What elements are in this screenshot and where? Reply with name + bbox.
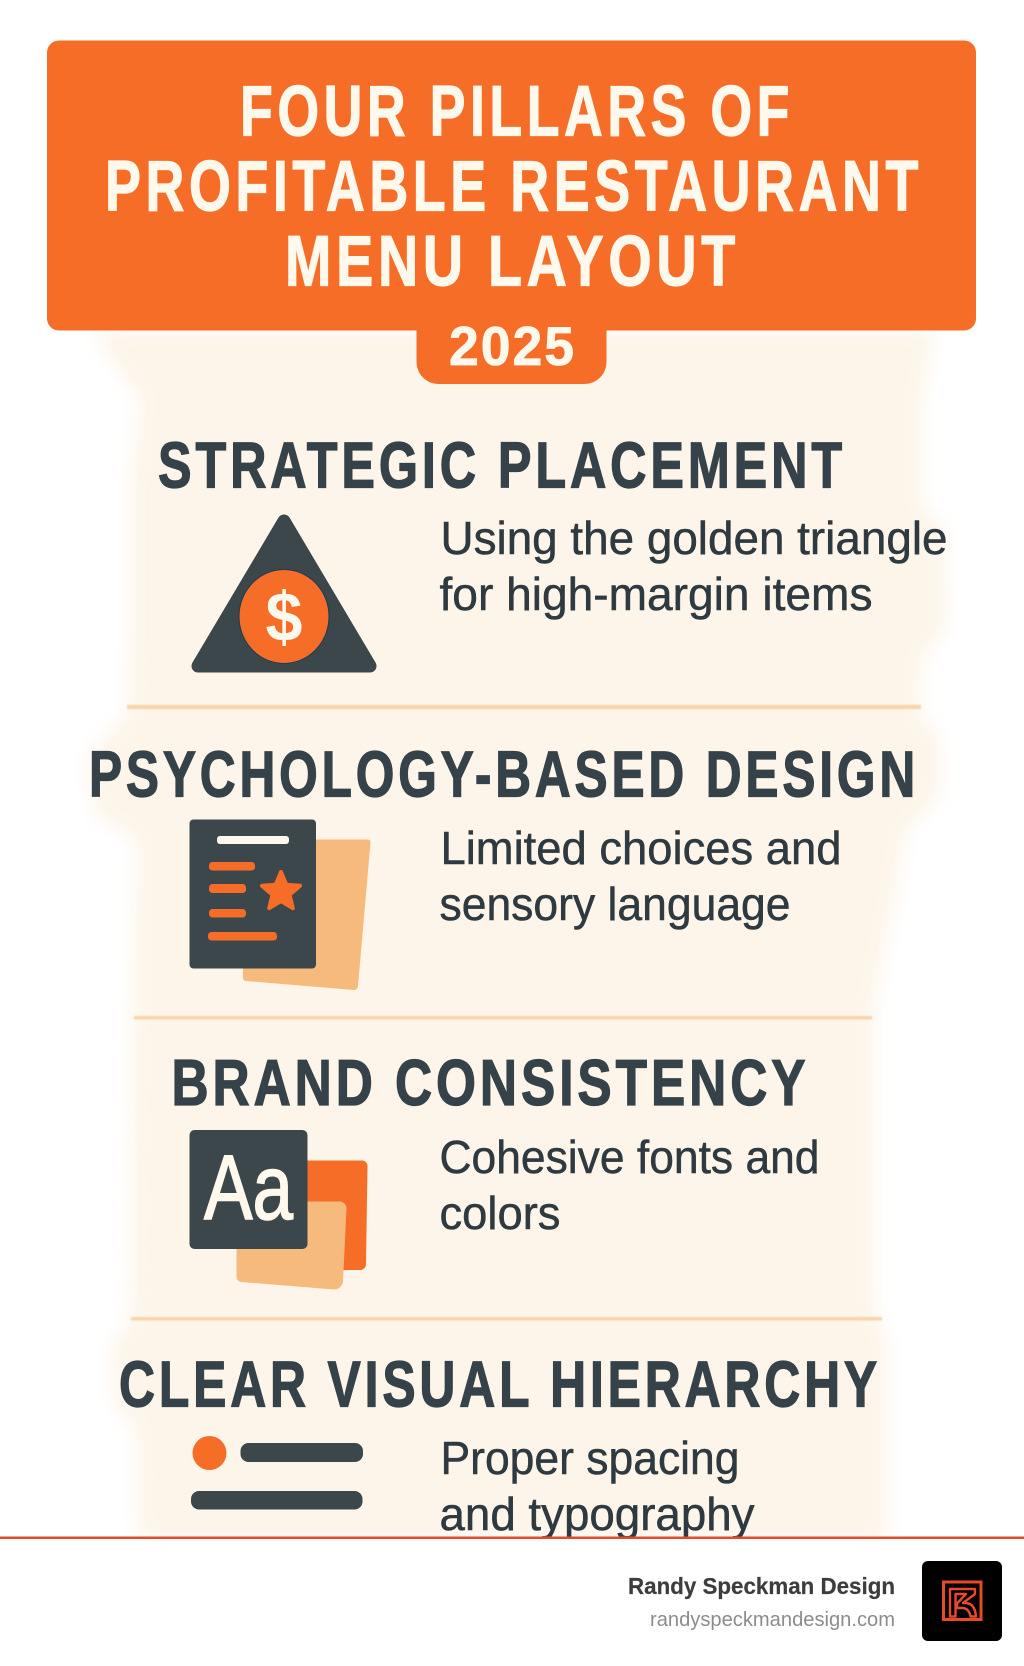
body: strategic placement: for high-margin items bbox=[440, 568, 872, 620]
body: psychology-based design bbox=[440, 822, 842, 930]
icon: triangle with dollar coin: $ bbox=[266, 578, 302, 656]
header banner bbox=[47, 40, 976, 330]
body: psychology-based design: sensory language bbox=[440, 878, 790, 930]
title: MENU LAYOUT bbox=[285, 222, 740, 302]
icon: logo bbox=[922, 1561, 1002, 1641]
heading: strategic placement: STRATEGIC PLACEMENT bbox=[158, 428, 846, 502]
body: strategic placement bbox=[440, 512, 948, 620]
pillar 2: psychology-based design bbox=[89, 738, 919, 990]
icon: triangle with dollar coin bbox=[198, 521, 370, 666]
footer url: randyspeckmandesign.com bbox=[650, 1609, 895, 1631]
body: clear visual hierarchy bbox=[440, 1432, 754, 1540]
footer bbox=[0, 1536, 1024, 1666]
body: psychology-based design: Limited choices and bbox=[440, 822, 842, 874]
year tab: 2025 bbox=[449, 315, 576, 377]
year tab bbox=[416, 315, 606, 384]
body: strategic placement: Using the golden triangle bbox=[440, 512, 948, 564]
body: brand consistency: Cohesive fonts and bbox=[440, 1131, 820, 1183]
title: FOUR PILLARS OF bbox=[240, 72, 794, 152]
cream background panel bbox=[85, 330, 948, 1540]
body: brand consistency: colors bbox=[440, 1187, 560, 1239]
body: clear visual hierarchy: Proper spacing bbox=[440, 1432, 740, 1484]
pillar 4: clear visual hierarchy bbox=[119, 1348, 881, 1540]
icon: type and colour swatches bbox=[190, 1130, 368, 1290]
pillar 1: strategic placement bbox=[158, 428, 948, 666]
icon: type and colour swatches: Aa bbox=[204, 1137, 294, 1239]
pillar 3: brand consistency bbox=[172, 1046, 820, 1290]
icon: menu page with star bbox=[190, 820, 371, 990]
icon: dot and text bars bbox=[191, 1436, 363, 1510]
heading: brand consistency: BRAND CONSISTENCY bbox=[172, 1046, 810, 1119]
body: clear visual hierarchy: and typography bbox=[440, 1488, 754, 1540]
body: brand consistency bbox=[440, 1131, 820, 1239]
footer brand name: Randy Speckman Design bbox=[628, 1573, 895, 1599]
title bbox=[105, 72, 923, 302]
